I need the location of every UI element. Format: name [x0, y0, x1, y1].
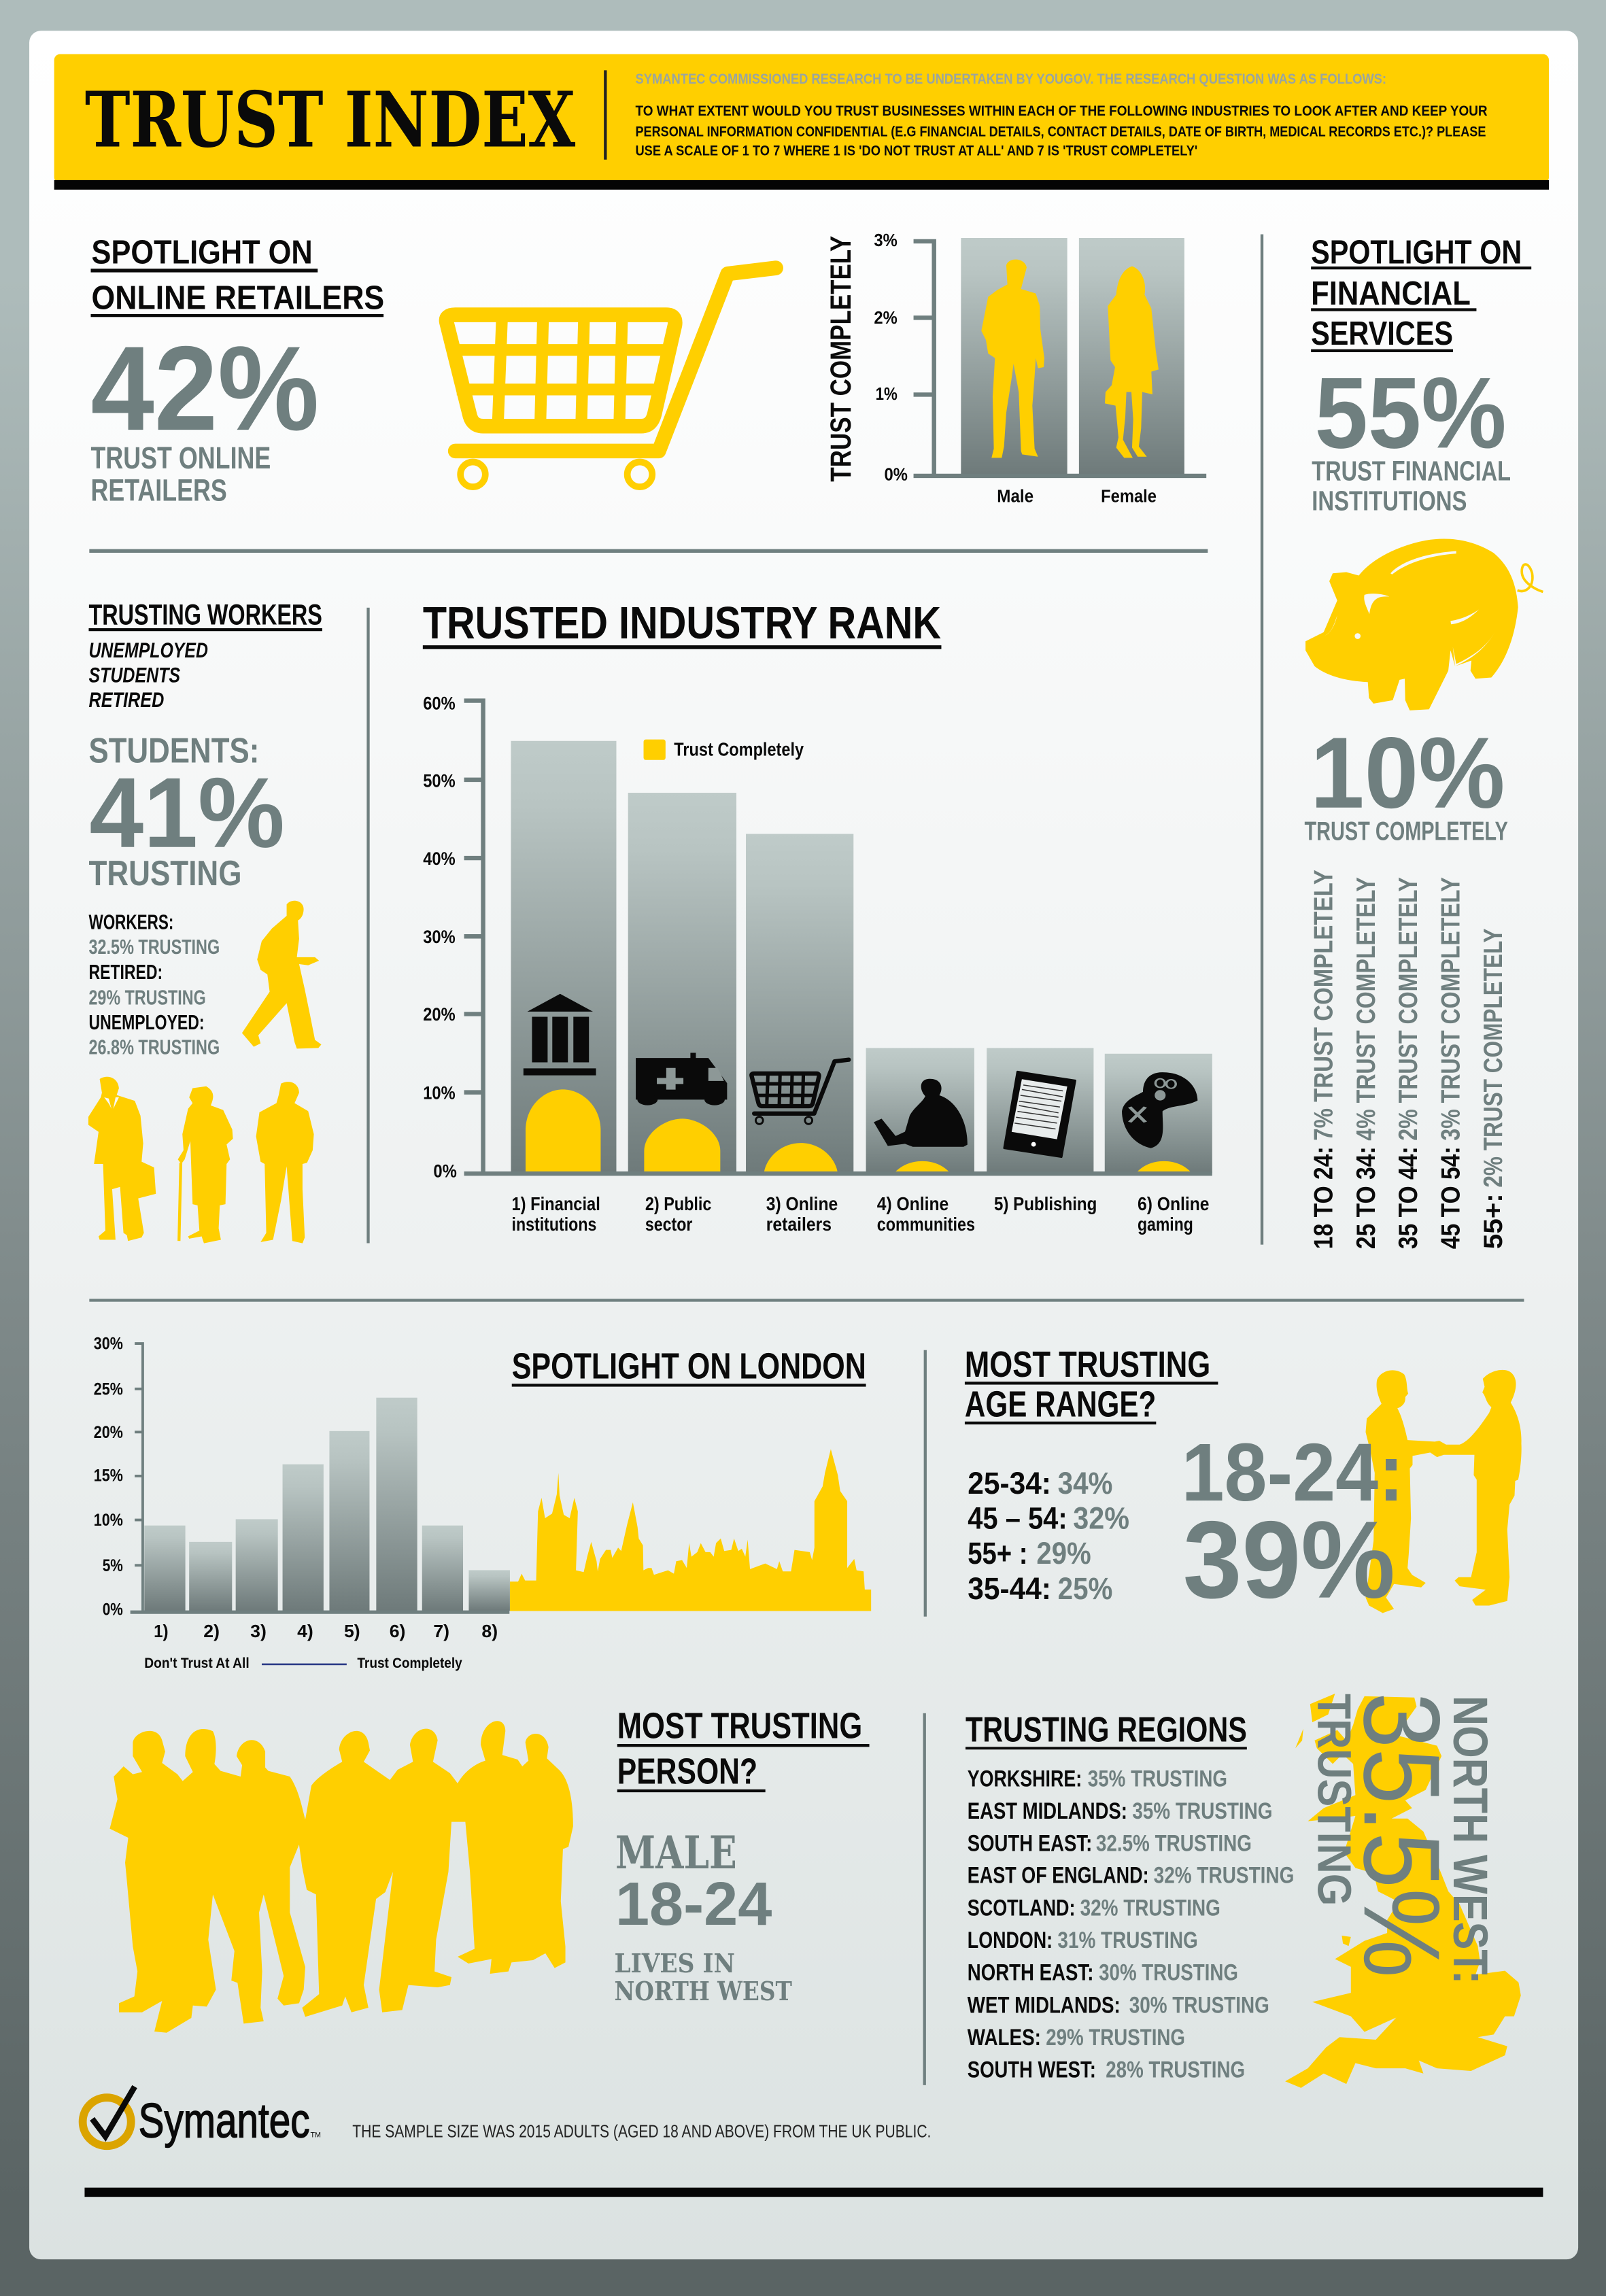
- heading: MOST TRUSTING: [617, 1705, 862, 1746]
- axis labels: sector: [645, 1214, 693, 1235]
- panel: spotlight on financial services: [1304, 234, 1543, 1249]
- region list: 30% TRUSTING: [1099, 1960, 1238, 1986]
- axis labels: 2) Public: [645, 1193, 711, 1214]
- caption: INSTITUTIONS: [1312, 485, 1467, 516]
- chart: industry bars: 30%: [423, 927, 456, 947]
- icon: game controller: [1122, 1072, 1197, 1148]
- students 41%: STUDENTS:: [88, 730, 259, 770]
- region list: YORKSHIRE:: [968, 1766, 1082, 1792]
- heading: [965, 1344, 1218, 1424]
- students 41%: TRUSTING: [88, 853, 241, 893]
- icon: london skyline: [510, 1449, 871, 1611]
- icon: symantec logo: Symantec: [139, 2094, 310, 2148]
- chart: london trust scale: [94, 1335, 510, 1641]
- region list: SOUTH EAST:: [968, 1831, 1092, 1857]
- chart: industry bars: 0%: [433, 1161, 457, 1182]
- panel: spotlight on online retailers: [90, 234, 384, 508]
- icon: retired woman with cane: [178, 1086, 233, 1244]
- chart: industry bars: 60%: [423, 693, 456, 713]
- panel: trusting workers: [88, 599, 322, 1244]
- heading: MOST TRUSTING: [965, 1344, 1210, 1385]
- male bar: [961, 238, 1067, 475]
- legend: scale: [144, 1655, 462, 1671]
- heading: TRUSTING WORKERS: [88, 599, 322, 632]
- region list: 31% TRUSTING: [1057, 1927, 1198, 1953]
- research intro text: [635, 71, 1488, 158]
- chart: industry bars: 20%: [423, 1004, 456, 1025]
- age list: 35-44:: [968, 1571, 1051, 1606]
- research intro text: TO WHAT EXTENT WOULD YOU TRUST BUSINESSES WITHIN EACH OF THE FOLLOWING INDUSTRIES TO LOOK AFTER AND KEEP YOUR: [635, 103, 1488, 119]
- age breakdown vertical text: 25 TO 34:: [1352, 1146, 1381, 1249]
- age list: [968, 1466, 1129, 1606]
- chart: industry bars: 40%: [423, 849, 456, 869]
- panel: trusting regions: [966, 1692, 1521, 2088]
- age breakdown vertical text: 3% TRUST COMPLETELY: [1437, 877, 1466, 1141]
- axis labels: communities: [877, 1214, 975, 1235]
- age breakdown vertical text: 55+:: [1479, 1193, 1508, 1249]
- axis labels: retailers: [766, 1214, 832, 1235]
- chart: london trust scale: 2): [203, 1622, 220, 1641]
- axis labels: gaming: [1138, 1214, 1193, 1235]
- age list: 25%: [1058, 1571, 1112, 1606]
- icon: e-reader tablet: [1004, 1072, 1075, 1156]
- big number 10%: 10%: [1310, 717, 1505, 829]
- female bar: [1079, 238, 1184, 475]
- age breakdown vertical text: 2% TRUST COMPLETELY: [1394, 877, 1423, 1141]
- profile: male 18-24: LIVES IN: [614, 1949, 735, 1979]
- axis labels: 5) Publishing: [994, 1193, 1097, 1214]
- age breakdown vertical text: 35 TO 44:: [1394, 1146, 1423, 1249]
- legend: scale: Trust Completely: [357, 1655, 462, 1671]
- heading: SERVICES: [1311, 315, 1453, 352]
- chart: london trust scale: 20%: [94, 1424, 123, 1442]
- chart: london trust scale: 0%: [103, 1601, 123, 1620]
- icon: person on laptop: [874, 1079, 968, 1147]
- chart: trust completely by gender: 1%: [876, 385, 898, 404]
- title: TRUST INDEX: [85, 75, 575, 165]
- panel: header banner: [54, 54, 1549, 190]
- age breakdown vertical text: 2% TRUST COMPLETELY: [1479, 928, 1508, 1188]
- chart: industry bars: [423, 693, 1212, 1182]
- age breakdown vertical text: 4% TRUST COMPLETELY: [1352, 877, 1381, 1141]
- students 41%: [88, 730, 285, 893]
- other groups: WORKERS:: [88, 912, 173, 934]
- chart: london trust scale: 10%: [94, 1511, 123, 1530]
- region list: [968, 1766, 1294, 2083]
- caption: RETAILERS: [90, 473, 227, 508]
- other groups: 29% TRUSTING: [88, 987, 206, 1009]
- heading: ONLINE RETAILERS: [92, 279, 384, 316]
- chart: london trust scale: 5): [344, 1622, 360, 1641]
- region list: 35% TRUSTING: [1088, 1766, 1227, 1792]
- group list: UNEMPLOYED: [88, 638, 208, 662]
- icon: ambulance: [636, 1052, 727, 1106]
- big number 18-24: 39%: [1182, 1426, 1404, 1622]
- heading: PERSON?: [617, 1751, 757, 1792]
- research intro text: SYMANTEC COMMISSIONED RESEARCH TO BE UNDERTAKEN BY YOUGOV. THE RESEARCH QUESTION WAS AS FOLLOWS:: [635, 71, 1386, 87]
- region list: NORTH EAST:: [968, 1960, 1093, 1986]
- big number 18-24: 39%: 39%: [1183, 1499, 1395, 1622]
- legend: [644, 738, 804, 760]
- other groups: RETIRED:: [88, 961, 163, 984]
- region list: WET MIDLANDS:: [968, 1993, 1121, 2019]
- age list: 34%: [1058, 1466, 1112, 1501]
- age breakdown vertical text: 45 TO 54:: [1437, 1146, 1466, 1249]
- chart: trust completely by gender: 0%: [884, 465, 908, 484]
- caption: TRUST ONLINE: [90, 441, 271, 475]
- region list: 32% TRUSTING: [1154, 1863, 1294, 1889]
- panel: spotlight on london: [94, 1335, 871, 1671]
- other groups: [88, 912, 220, 1059]
- heading: SPOTLIGHT ON: [92, 234, 313, 271]
- callout: north west 35.5%: TRUSTING: [1308, 1694, 1361, 1906]
- profile: male 18-24: 18-24: [615, 1870, 772, 1938]
- icon: female silhouette: [1105, 267, 1159, 458]
- axis labels: 3) Online: [766, 1193, 838, 1214]
- group list: STUDENTS: [88, 664, 180, 687]
- chart: london trust scale: 3): [250, 1622, 267, 1641]
- icon: walking student: [242, 901, 322, 1048]
- chart: london trust scale: 4): [297, 1622, 313, 1641]
- chart: trust completely by gender: 2%: [874, 309, 898, 328]
- students 41%: 41%: [89, 757, 285, 869]
- legend: scale: Don't Trust At All: [144, 1655, 250, 1671]
- chart: london trust scale: 25%: [94, 1380, 123, 1399]
- region list: 35% TRUSTING: [1132, 1798, 1273, 1824]
- region list: EAST OF ENGLAND:: [968, 1863, 1149, 1889]
- callout: north west 35.5%: 35.5%: [1342, 1692, 1463, 1978]
- chart: industry bars: 10%: [423, 1082, 456, 1103]
- age breakdown vertical text: [1309, 870, 1508, 1249]
- region list: 32% TRUSTING: [1080, 1896, 1220, 1921]
- panel: most trusting person: [109, 1705, 870, 2033]
- region list: 32.5% TRUSTING: [1096, 1831, 1252, 1857]
- icon: small cart: [751, 1060, 849, 1124]
- axis labels: institutions: [512, 1214, 596, 1235]
- panel: trusted industry rank: [423, 598, 1212, 1235]
- region list: SCOTLAND:: [968, 1896, 1075, 1921]
- big number 42%: 42%: [90, 322, 319, 456]
- heading: SPOTLIGHT ON: [1311, 234, 1522, 271]
- icon: crowd silhouette: [109, 1721, 573, 2033]
- icon: piggy bank: [1305, 539, 1543, 710]
- heading: FINANCIAL: [1311, 275, 1471, 312]
- research intro text: USE A SCALE OF 1 TO 7 WHERE 1 IS 'DO NOT TRUST AT ALL' AND 7 IS 'TRUST COMPLETELY': [635, 142, 1197, 158]
- chart: london trust scale: 30%: [94, 1335, 123, 1354]
- legend: Trust Completely: [674, 738, 804, 759]
- chart: trust completely by gender: [825, 231, 1206, 507]
- caption: TRUST FINANCIAL: [1312, 455, 1511, 486]
- age list: 32%: [1073, 1501, 1129, 1535]
- big number 18-24: 39%: 18-24:: [1182, 1426, 1404, 1518]
- icon: shopping cart: [446, 268, 776, 487]
- icon: bank: [524, 994, 596, 1076]
- region list: WALES:: [968, 2025, 1041, 2051]
- age breakdown vertical text: 18 TO 24:: [1309, 1146, 1338, 1249]
- region list: LONDON:: [968, 1927, 1053, 1953]
- group list: RETIRED: [88, 688, 164, 712]
- group list: [88, 638, 208, 712]
- chart: trust completely by gender: Male: [997, 487, 1033, 507]
- chart: trust completely by gender: 3%: [874, 231, 898, 250]
- icon: worker with briefcase: [88, 1077, 156, 1241]
- axis labels: [512, 1193, 1209, 1235]
- heading: SPOTLIGHT ON LONDON: [512, 1346, 866, 1387]
- region list: 29% TRUSTING: [1046, 2025, 1185, 2051]
- axis labels: 4) Online: [877, 1193, 949, 1214]
- chart: london trust scale: 15%: [94, 1467, 123, 1485]
- chart: london trust scale: 5%: [103, 1557, 123, 1575]
- axis labels: 1) Financial: [512, 1193, 600, 1214]
- heading: TRUSTED INDUSTRY RANK: [423, 598, 941, 649]
- region list: EAST MIDLANDS:: [968, 1798, 1127, 1824]
- yellow trust completely domes: [526, 1089, 1191, 1171]
- age list: 45 – 54:: [968, 1501, 1067, 1535]
- region list: 30% TRUSTING: [1129, 1993, 1269, 2019]
- heading: TRUSTING REGIONS: [966, 1709, 1247, 1749]
- other groups: 26.8% TRUSTING: [88, 1037, 220, 1059]
- icon: handshake: [1365, 1370, 1522, 1613]
- icon: male silhouette: [981, 260, 1044, 458]
- other groups: UNEMPLOYED:: [88, 1012, 205, 1034]
- heading: [617, 1705, 870, 1792]
- heading: AGE RANGE?: [965, 1384, 1156, 1424]
- chart: london trust scale: 7): [433, 1622, 449, 1641]
- caption: [90, 441, 271, 508]
- icon: uk map: [1285, 1694, 1521, 2088]
- icon: symantec logo: [83, 2087, 321, 2148]
- age list: 25-34:: [968, 1466, 1051, 1501]
- callout: north west 35.5%: NORTH WEST:: [1443, 1696, 1497, 1984]
- age list: 29%: [1036, 1536, 1091, 1571]
- region list: SOUTH WEST:: [968, 2057, 1096, 2083]
- big number 55%: 55%: [1315, 356, 1507, 469]
- profile: male 18-24: MALE: [615, 1826, 737, 1879]
- chart: industry bars: 50%: [423, 771, 456, 791]
- other groups: 32.5% TRUSTING: [88, 936, 220, 959]
- chart: trust completely by gender: Female: [1101, 487, 1157, 507]
- axis labels: 6) Online: [1138, 1193, 1209, 1214]
- chart: london trust scale: 1): [154, 1622, 169, 1641]
- axis title: TRUST COMPLETELY: [825, 236, 857, 482]
- icon: unemployed man: [256, 1082, 314, 1244]
- profile: male 18-24: NORTH WEST: [614, 1976, 792, 2007]
- panel: most trusting age range: [965, 1344, 1522, 1622]
- heading: [90, 234, 384, 317]
- chart: london trust scale: 8): [481, 1622, 498, 1641]
- caption: [1312, 455, 1511, 516]
- heading: [1311, 234, 1531, 352]
- region list: 28% TRUSTING: [1106, 2057, 1245, 2083]
- caption: TRUST COMPLETELY: [1304, 817, 1508, 846]
- age breakdown vertical text: 7% TRUST COMPLETELY: [1309, 870, 1338, 1141]
- age list: 55+ :: [968, 1536, 1028, 1571]
- footer note: THE SAMPLE SIZE WAS 2015 ADULTS (AGED 18 AND ABOVE) FROM THE UK PUBLIC.: [352, 2122, 931, 2141]
- profile: male 18-24: [614, 1826, 792, 2007]
- chart: london trust scale: 6): [390, 1622, 405, 1641]
- callout: north west 35.5%: [1308, 1692, 1497, 1984]
- icon: symantec logo: TM: [310, 2131, 321, 2139]
